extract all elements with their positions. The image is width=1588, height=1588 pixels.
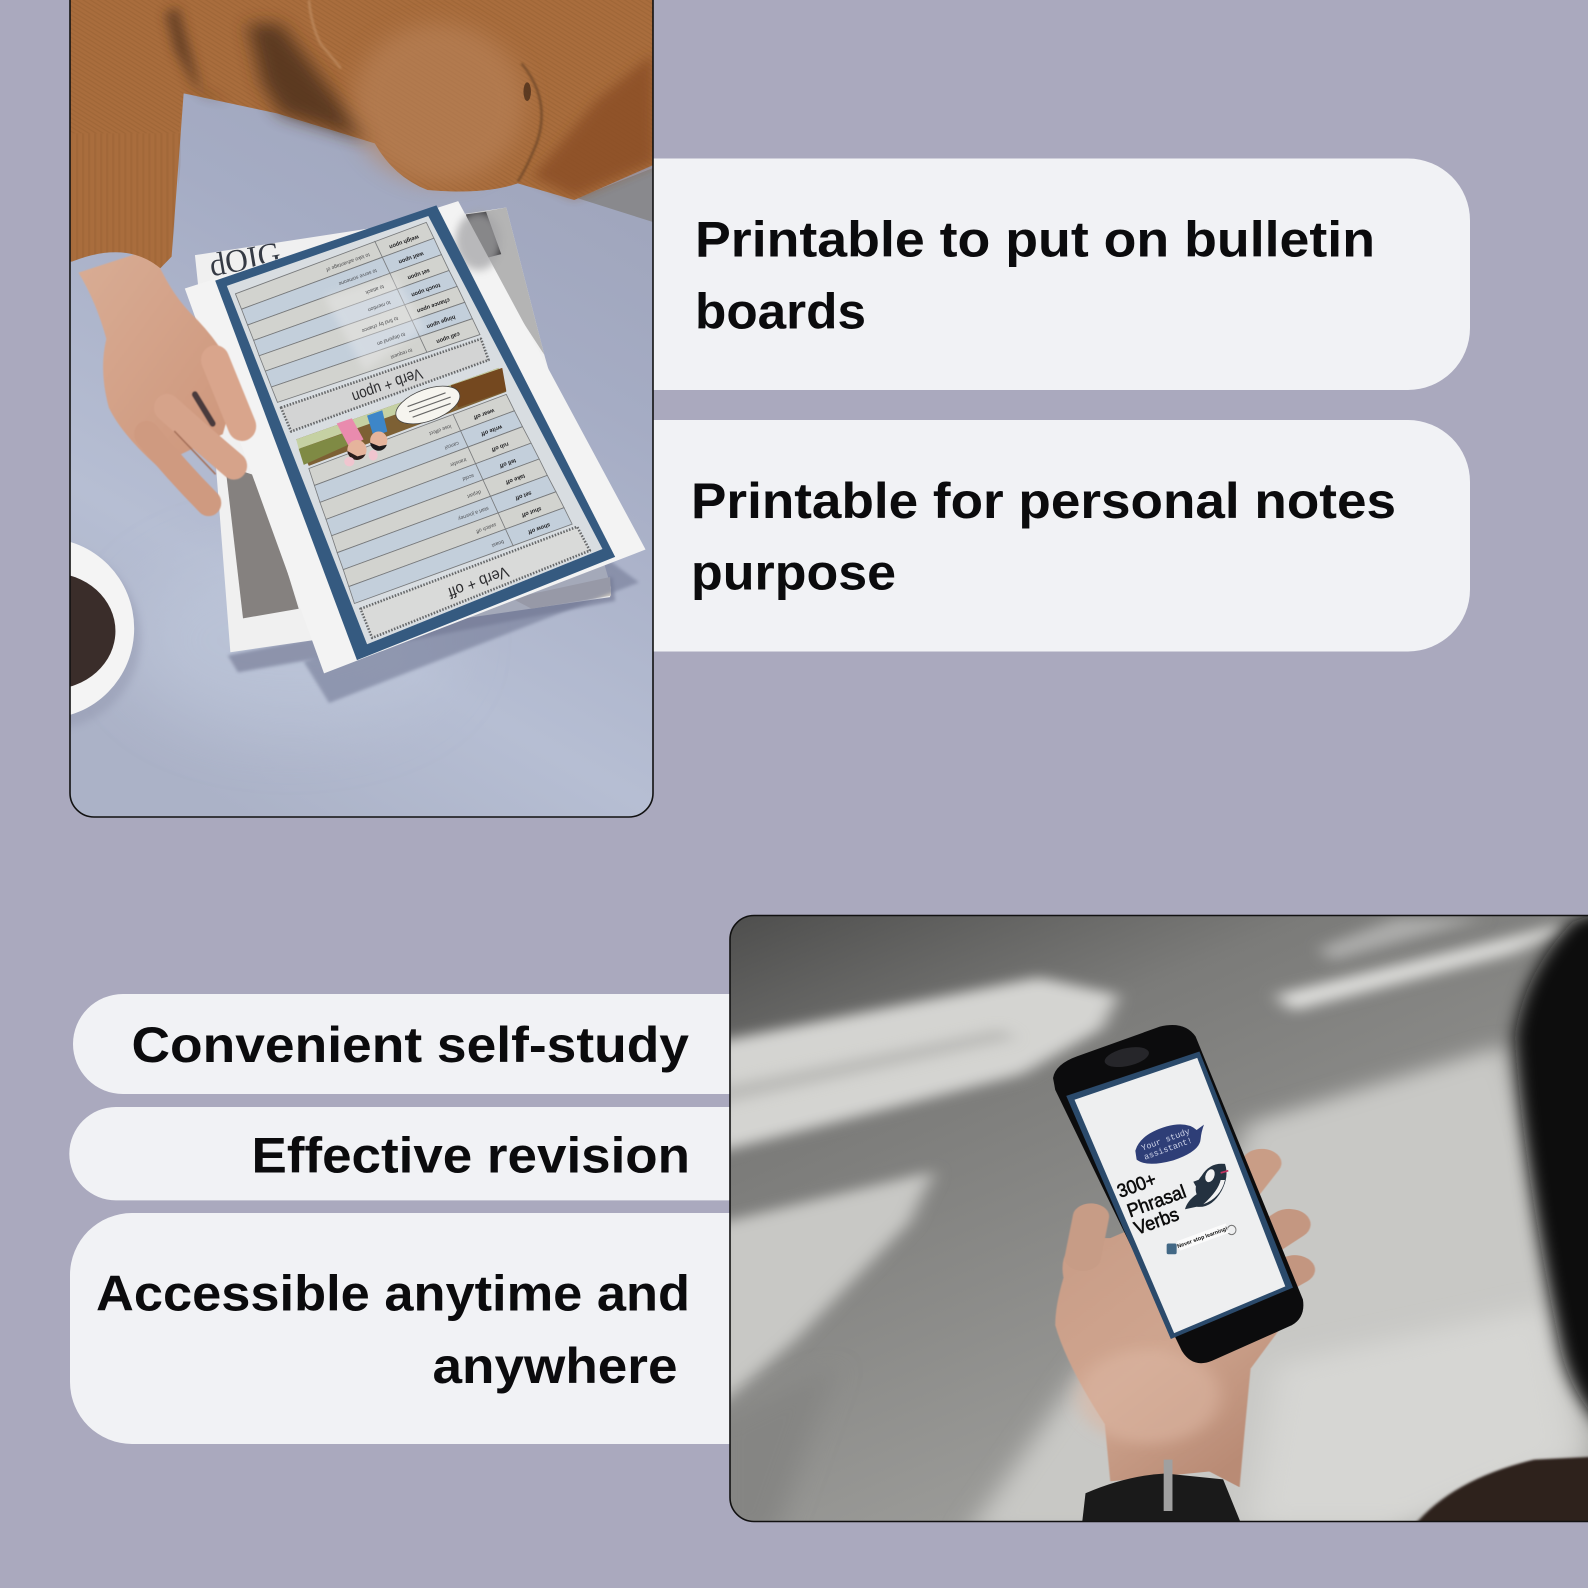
table light patch	[195, 641, 234, 674]
phrasal verb labels: take off	[505, 472, 526, 485]
cartoon banner	[296, 368, 506, 466]
panel: printable to put on bulletin boards	[653, 158, 1470, 390]
phrasal verb labels: touch upon	[410, 281, 441, 298]
phrasal verb labels: call upon	[435, 330, 460, 344]
sheet glare	[324, 275, 425, 371]
phrasal verb labels: set upon	[406, 267, 430, 281]
text: accessible anytime and anywhere: anywhere	[432, 1338, 678, 1394]
panel: convenient self-study	[73, 994, 730, 1094]
phrasal verb meanings: depart	[466, 488, 482, 499]
phone title: 300+ Phrasal Verbs: 300+	[1115, 1169, 1159, 1203]
phone body	[1053, 1025, 1303, 1363]
phone title: 300+ Phrasal Verbs: Verbs	[1132, 1204, 1182, 1240]
photo: printed sheet on table	[70, 0, 652, 816]
magazine masthead: dOIG	[207, 234, 283, 283]
printed sheet	[185, 201, 646, 673]
phone earpiece	[1104, 1047, 1149, 1067]
phrasal verb labels: weigh upon	[388, 233, 420, 250]
phrasal verb labels: write off	[480, 423, 504, 436]
hand on sheet	[78, 249, 242, 503]
phrasal verb meanings: switch off	[475, 521, 497, 534]
icon: orca mascot	[1185, 1164, 1228, 1209]
heading: Verb + off: Verb + off	[445, 562, 511, 601]
phone speech bubble text: assistant!	[1143, 1136, 1194, 1163]
text: printable personal notes: purpose	[691, 544, 896, 600]
phone button text: Never stop learning!	[1177, 1226, 1229, 1250]
phrasal verb labels	[388, 233, 551, 535]
phrasal verb labels: show off	[527, 521, 551, 535]
phrasal verb meanings: scold	[462, 472, 475, 482]
phrasal verb meanings: lose effect	[428, 423, 452, 436]
phone title: 300+ Phrasal Verbs	[1117, 1175, 1186, 1234]
phrasal verb labels: set off	[514, 489, 532, 501]
grey cloth behind sweater	[577, 168, 653, 222]
phrasal verb labels: wait upon	[397, 250, 425, 265]
phrasal verb labels: wear off	[473, 407, 496, 420]
phrasal verb labels: rub off	[491, 440, 509, 452]
text: printable personal notes	[691, 473, 1396, 600]
pointer icon	[1227, 1225, 1236, 1235]
sunlight streaks on the floor	[714, 918, 1588, 1535]
button icon	[1167, 1244, 1177, 1254]
phone screen	[1066, 1052, 1293, 1339]
phrasal verb meanings: to serve someone	[338, 267, 377, 286]
panel: printable for personal notes	[653, 420, 1470, 652]
text: printable bulletin boards: Printable to put on bulletin	[695, 212, 1375, 268]
heading: Verb + upon: Verb + upon	[350, 364, 425, 405]
phrasal verb meanings: to find by chance	[361, 315, 399, 333]
phrasal verb meanings: to depend on	[376, 331, 406, 346]
panel: accessible anytime and anywhere	[70, 1213, 730, 1444]
phrasal verb labels: hinge upon	[425, 313, 456, 329]
text: printable personal notes: Printable for personal notes	[691, 473, 1396, 529]
table rows: lower block	[309, 394, 572, 604]
photo: hand holding phone	[714, 906, 1588, 1535]
phrasal verb labels: shut off	[521, 505, 542, 518]
phrasal verb meanings: to mention	[367, 299, 391, 313]
text: accessible anytime and anywhere	[96, 1266, 690, 1394]
fingers	[147, 360, 242, 503]
watch strap	[1082, 1460, 1240, 1521]
phrasal verb meanings	[325, 251, 505, 548]
phone title: 300+ Phrasal Verbs: Phrasal	[1125, 1182, 1189, 1222]
text: accessible anytime and anywhere: Accessible anytime and	[96, 1266, 690, 1322]
phrasal verb meanings: to request	[389, 346, 413, 360]
person's shoulder in foreground	[1515, 906, 1588, 1440]
photo 2 outline	[730, 916, 1588, 1522]
photo 1 outline	[70, 0, 653, 817]
phrasal verb meanings: start a journey	[457, 505, 489, 522]
phone speech bubble text: Your study	[1140, 1127, 1191, 1154]
phrasal verb labels: tell off	[499, 457, 516, 468]
icon: coffee cup	[70, 542, 141, 726]
phrasal verb meanings: to take advantage of	[325, 251, 370, 273]
table rows: upper block	[235, 222, 480, 402]
sheet shadow	[304, 561, 639, 703]
text: printable bulletin boards: boards	[695, 284, 866, 340]
sweater	[68, 0, 657, 268]
magazines under the sheet	[195, 208, 615, 672]
text: printable bulletin boards	[695, 212, 1375, 340]
phrasal verb meanings: transfer	[449, 456, 467, 468]
panel: effective revision	[69, 1107, 730, 1200]
phrasal verb meanings: boast	[490, 538, 505, 548]
phrasal verb labels: chance upon	[416, 296, 450, 314]
text: convenient self-study: Convenient self-study	[132, 1017, 689, 1073]
forearm in foreground	[1413, 1456, 1588, 1527]
text: effective revision: Effective revision	[252, 1128, 690, 1184]
phrasal verb meanings: cancel	[444, 440, 459, 450]
hand	[1055, 1163, 1300, 1487]
icon: speech bubble	[1135, 1124, 1204, 1164]
phrasal verb meanings: to attack	[364, 283, 385, 295]
